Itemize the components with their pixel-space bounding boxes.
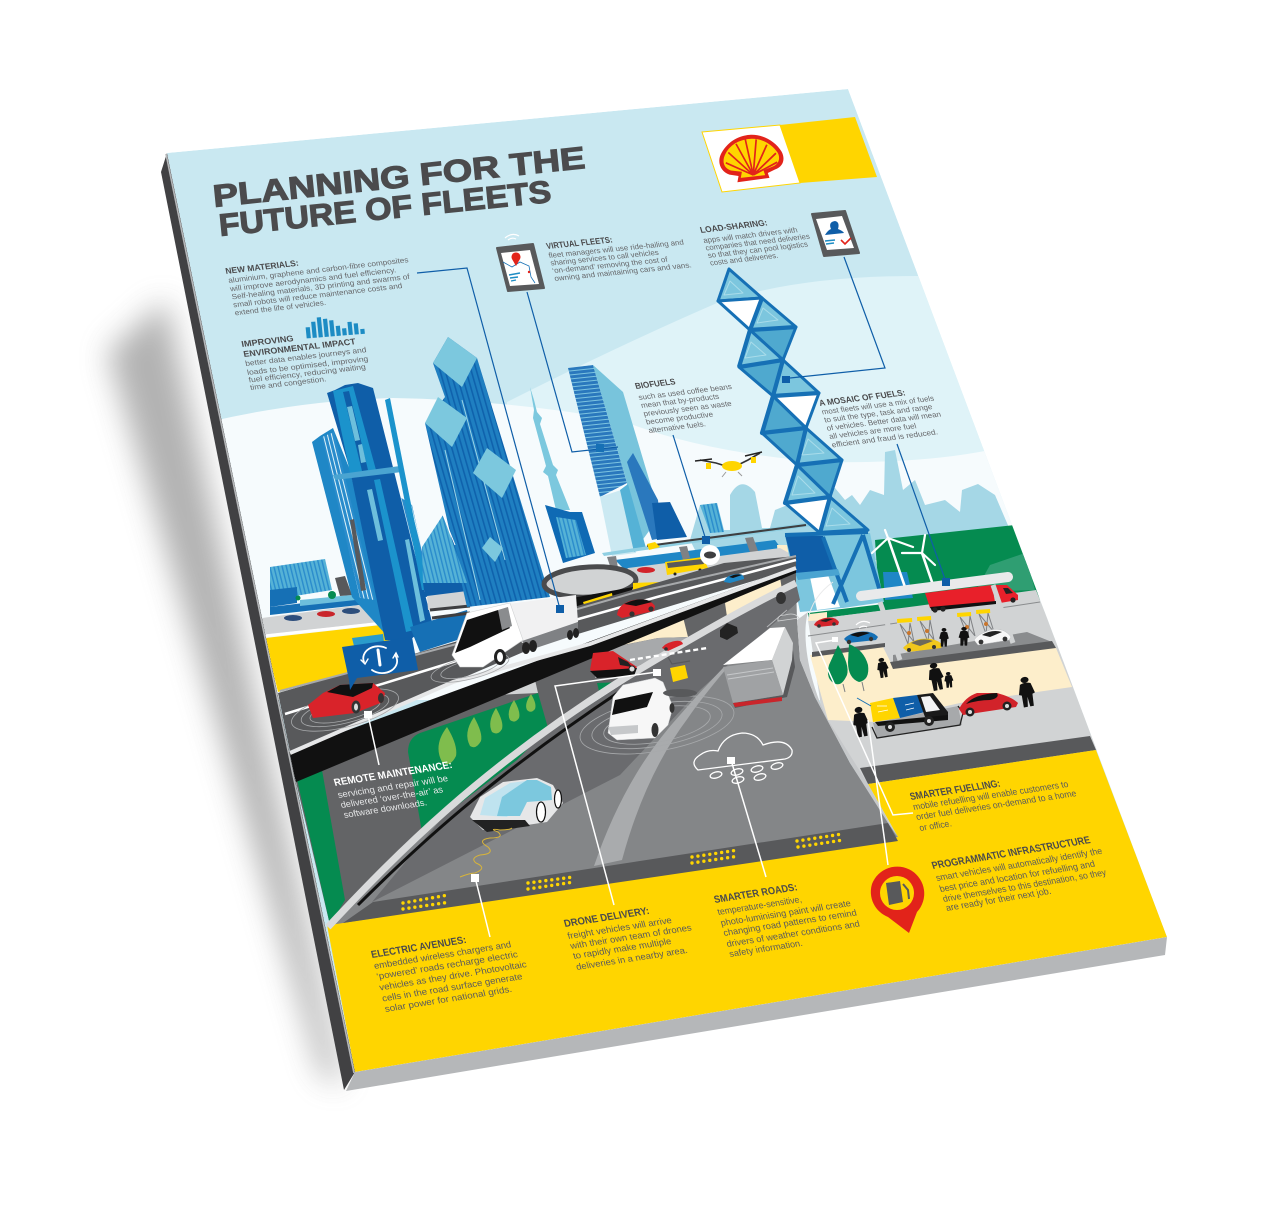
pillars: [880, 585, 1013, 660]
text: improving environmental impact: [240, 325, 372, 392]
text: electric avenues: vehicles as they drive. Photovoltaic: [378, 959, 528, 992]
text: biofuels: alternative fuels.: [647, 419, 707, 435]
buildings: mid blocks: [545, 453, 724, 563]
station lane lines: [808, 602, 1040, 636]
text: programmatic infrastructure: best price and location for refuelling and: [938, 859, 1096, 894]
leader squares: [596, 376, 950, 586]
book edges: [161, 153, 1167, 1091]
leader short blue: [857, 698, 871, 706]
text: virtual fleets: fleet managers will use ride-hailing and: [548, 238, 685, 260]
far road: [262, 605, 375, 634]
text: electric avenues: cells in the road surface generate: [381, 971, 523, 1003]
yellow band: [780, 117, 877, 183]
text: programmatic infrastructure: [930, 834, 1113, 913]
text: load-sharing: so that they can pool logistics: [706, 240, 809, 260]
text: new materials: small robots will reduce maintenance costs and: [232, 281, 403, 309]
blue band behind middle road: [615, 540, 782, 570]
distant skyline: [690, 450, 1010, 560]
red sports car: [308, 683, 385, 718]
autonomous pod marker: [700, 545, 720, 565]
text: programmatic infrastructure: smart vehicles will automatically identify the: [934, 846, 1104, 883]
text: remote maintenance: delivered ‘over-the-air’ as: [339, 784, 445, 810]
far yellow verge: [265, 625, 400, 692]
text: smarter fuelling: [909, 768, 1081, 833]
text: a mosaic of fuels: to suit the type, task and range: [823, 402, 934, 424]
green patch: [597, 682, 623, 695]
viaduct lane line: [285, 560, 796, 714]
thick zigzag struts: [739, 298, 868, 533]
viaduct black underside: [288, 566, 796, 782]
white truck: [452, 595, 579, 667]
viaduct edge line: [290, 568, 796, 753]
text: smarter roads: SMARTER ROADS:: [713, 882, 799, 906]
road curve edge: [328, 583, 796, 927]
text: electric avenues: solar power for national grids.: [384, 984, 513, 1014]
fuel station: [861, 577, 1018, 660]
left side road strip: [812, 643, 885, 657]
zigzag tower: [718, 269, 868, 533]
text: new materials: extend the life of vehicles.: [234, 298, 327, 317]
sign: remote maintenance: [342, 637, 418, 690]
text: electric avenues: [370, 927, 534, 1014]
building: low left block: [270, 559, 360, 615]
text: new materials: Self-healing materials, 3D printing and swarms of: [231, 272, 411, 301]
book shadow: [108, 300, 342, 1085]
under viaduct: [292, 573, 796, 925]
lower road: [330, 583, 898, 925]
road edge white arc: [808, 582, 833, 620]
tower base: [785, 532, 913, 612]
text: smarter fuelling: order fuel deliveries on-demand to a home: [915, 788, 1078, 822]
text: drone delivery: DRONE DELIVERY:: [563, 906, 651, 930]
building: side tower: [400, 498, 422, 562]
pedestrians: [850, 657, 1037, 738]
bottom page edge: [346, 937, 1167, 1091]
pale green corner: [975, 553, 1035, 592]
text: electric avenues: ‘powered’ roads recharge electric: [375, 949, 519, 981]
text: electric avenues: embedded wireless chargers and: [373, 939, 512, 971]
blue base of tower: [410, 610, 473, 652]
road edge band: [797, 612, 898, 838]
small red car: [814, 618, 839, 628]
small red car lower: [662, 641, 683, 651]
page edge highlight: [166, 154, 354, 1073]
leader square: [556, 605, 564, 613]
red truck: [925, 585, 1018, 613]
pale horizon: [200, 398, 1100, 700]
icon: wifi over car: [856, 621, 870, 628]
text: programmatic infrastructure: drive themselves to this destination, so they: [941, 867, 1108, 904]
text: drone delivery: [562, 900, 699, 972]
text: a mosaic of fuels: efficient and fraud is reduced.: [830, 427, 939, 449]
glass pod car: [470, 778, 563, 832]
text: virtual fleets: sharing services to call vehicles: [549, 248, 660, 267]
crystal facets: [425, 337, 516, 562]
text: load-sharing: [699, 213, 816, 267]
small road cloud: [778, 614, 799, 621]
road stud strip: [343, 823, 898, 923]
title: PLANNING FOR THE: [211, 140, 587, 214]
wireless charging rings: [288, 648, 738, 764]
text: smarter roads: safety information.: [728, 938, 804, 959]
leader lines blue: [417, 257, 946, 609]
text: programmatic infrastructure: are ready for their next job.: [944, 886, 1052, 913]
text: smarter fuelling: SMARTER FUELLING:: [909, 779, 1002, 803]
text: smarter fuelling: or office.: [918, 818, 953, 833]
text: drone delivery: with their own team of drones: [568, 922, 693, 951]
text: a mosaic of fuels: A MOSAIC OF FUELS:: [818, 387, 907, 408]
text: improving environmental impact: IMPROVING: [240, 333, 295, 349]
light road stripe: [594, 668, 727, 866]
text: smarter roads: changing road patterns to remind: [722, 908, 858, 938]
text: improving environmental impact: time and congestion.: [249, 374, 327, 392]
building: small left tower: [312, 428, 388, 637]
small dark pod far: [776, 592, 786, 604]
inner triangle highlights: [724, 281, 850, 526]
squiggle charging line: [460, 828, 512, 877]
building: tall blue tower: [327, 383, 432, 640]
white car: [974, 629, 1011, 645]
text: biofuels: become productive: [645, 410, 714, 426]
grey pad: [873, 706, 962, 738]
icon: tablet with map: [497, 244, 544, 291]
small dark pod: [720, 623, 738, 640]
green ground strip: [808, 604, 880, 619]
monorail: [602, 522, 812, 569]
green strip left: [296, 770, 345, 925]
base ring road: [430, 606, 470, 618]
text: new materials: aluminium, graphene and carbon-fibre composites: [227, 255, 409, 285]
leader lines white: [368, 640, 913, 937]
viaduct road: [278, 556, 796, 752]
text: remote maintenance: [333, 760, 463, 820]
right ground base: [808, 590, 1100, 784]
text: remote maintenance: REMOTE MAINTENANCE:: [333, 760, 454, 789]
fuel pumps: [897, 609, 994, 644]
green field right: [875, 525, 1040, 612]
road curve black line: [358, 690, 622, 905]
text: load-sharing: companies that need deliveries: [704, 232, 811, 252]
building: glass tower: [568, 365, 660, 556]
base grey ground: [427, 591, 468, 610]
blue electric car: [844, 632, 878, 644]
yellow far verge: [633, 582, 659, 590]
text: biofuels: such as used coffee beans: [637, 382, 733, 402]
text: drone delivery: to rapidly make multiple: [572, 936, 673, 961]
green trees: [828, 644, 868, 692]
infographic page: [167, 89, 1167, 1072]
text: improving environmental impact: fuel efficiency, reducing waiting: [248, 362, 366, 384]
middle road: [627, 548, 790, 590]
spine: [161, 153, 355, 1090]
green park: [408, 693, 548, 832]
wind turbines: [872, 530, 935, 587]
freight trailer rear: [723, 627, 795, 708]
white logo box: [702, 125, 800, 192]
far road white line: [262, 623, 381, 636]
icon: environmental data bars: [305, 314, 365, 338]
text: programmatic infrastructure: PROGRAMMATIC INFRASTRUCTURE: [930, 835, 1092, 872]
red van: [590, 651, 637, 678]
text: remote maintenance: software downloads.: [342, 797, 428, 820]
text: biofuels: BIOFUELS: [634, 376, 677, 391]
bottom yellow panel: [327, 750, 1167, 1072]
icon: shell logo: [719, 134, 784, 182]
icon: tablet with profile: [812, 211, 859, 256]
text: drone delivery: deliveries in a nearby area.: [575, 945, 689, 972]
text: drone delivery: freight vehicles will arrive: [566, 915, 673, 941]
red car viaduct: [617, 599, 655, 618]
drone shadow: [663, 689, 697, 697]
dark strip right: [860, 736, 1096, 784]
text: new materials: will improve aerodynamics and fuel efficiency.: [228, 265, 397, 293]
text: biofuels: previously seen as waste: [642, 399, 733, 418]
text: improving environmental impact: loads to be optimised, improving: [246, 354, 369, 377]
title: [214, 146, 586, 236]
icon: wifi: [505, 234, 519, 240]
text: load-sharing: costs and deliveries.: [709, 251, 779, 267]
grey lower panel: [595, 637, 690, 678]
viaduct top verge: [280, 556, 796, 691]
yellow car: [903, 639, 943, 652]
yellow bus: [665, 557, 708, 576]
text: smarter fuelling: mobile refuelling will enable customers to: [912, 779, 1070, 812]
text: smarter roads: [713, 875, 864, 959]
text: improving environmental impact: better data enables journeys and: [244, 345, 367, 368]
text: a mosaic of fuels: [818, 384, 947, 449]
text: smarter roads: temperature-sensitive,: [716, 894, 803, 917]
text: load-sharing: LOAD-SHARING:: [699, 217, 769, 235]
text: biofuels: mean that by-products: [640, 392, 720, 410]
building: communications tower: [530, 387, 570, 510]
small cream patch: [808, 612, 827, 621]
text: virtual fleets: VIRTUAL FLEETS:: [545, 235, 614, 251]
text: virtual fleets: owning and maintaining cars and vans.: [553, 260, 692, 283]
people at pumps: [939, 628, 949, 647]
grey pier cap: [495, 680, 538, 695]
white autonomous car: [608, 678, 674, 740]
title: FUTURE OF FLEETS: [217, 174, 553, 243]
flyover ring: [543, 565, 637, 610]
canopy: [861, 577, 1008, 596]
text: improving environmental impact: ENVIRONMENTAL IMPACT: [242, 336, 357, 359]
text: biofuels: [634, 370, 743, 435]
text: new materials: [224, 245, 416, 317]
blue car: [724, 574, 744, 583]
far cars: [284, 608, 360, 621]
smart road cloud: [694, 733, 792, 784]
leaf trees: [438, 694, 536, 764]
building: crystal tower: [422, 337, 550, 607]
text: remote maintenance: servicing and repair will be: [336, 773, 449, 800]
icon: spanner with arrows: [361, 646, 398, 673]
fuel loop line: [872, 706, 963, 738]
text: a mosaic of fuels: all vehicles are more fuel: [828, 421, 918, 441]
sky background: [167, 89, 1167, 1072]
base dark ground: [423, 583, 464, 597]
text: new materials: NEW MATERIALS:: [224, 258, 300, 276]
cyan block behind sign: [352, 634, 384, 646]
text: load-sharing: apps will match drivers with: [702, 225, 799, 245]
yellow road studs: [403, 834, 843, 909]
text: smarter roads: drivers of weather conditions and: [725, 919, 861, 949]
red customer car: [959, 693, 1018, 716]
cream under viaduct: [613, 577, 782, 647]
small red car: [637, 567, 655, 573]
lower road dark wedge: [372, 583, 800, 902]
text: a mosaic of fuels: most fleets will use a mix of fuels: [821, 394, 935, 416]
cream block: [777, 545, 788, 553]
freight drones: [630, 648, 707, 682]
drone: [695, 452, 762, 477]
text: smarter roads: photo-luminising paint will create: [719, 898, 852, 928]
logo banner: [702, 117, 877, 192]
text: a mosaic of fuels: of vehicles. Better data will mean: [825, 410, 942, 433]
forecourt: [893, 632, 1052, 664]
icon: fuel location pin: [871, 867, 924, 933]
text: virtual fleets: [545, 227, 692, 283]
mobile fuel van: [870, 693, 948, 732]
text: electric avenues: ELECTRIC AVENUES:: [370, 935, 468, 961]
lighter sky band: [507, 276, 984, 462]
cream pavement: [810, 647, 1072, 722]
leader squares white: [364, 637, 838, 882]
upper thin stripe: [767, 610, 787, 627]
text: virtual fleets: ‘on-demand’ removing the cost of: [551, 255, 669, 275]
